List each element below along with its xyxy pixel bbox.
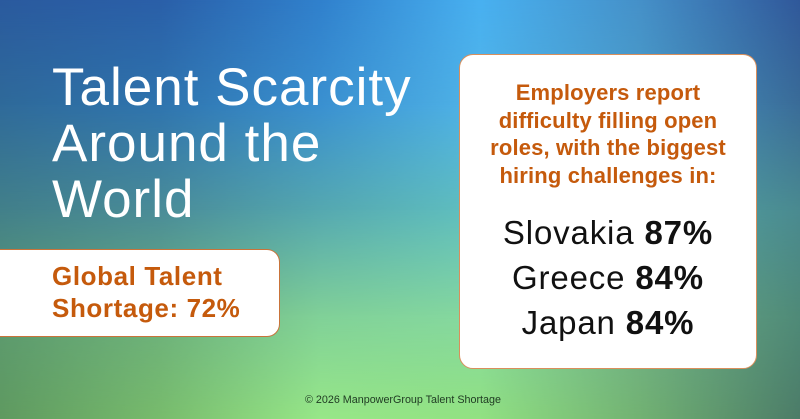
callout text: Shortage: 72% — [52, 293, 240, 323]
country list — [503, 214, 713, 341]
panel heading — [490, 80, 726, 188]
Slovakia: Slovakia 87% — [503, 214, 713, 251]
title — [52, 58, 412, 229]
title: Talent Scarcity — [52, 58, 412, 117]
panel heading: Employers report — [516, 80, 700, 105]
source footer: © 2026 ManpowerGroup Talent Shortage — [305, 394, 501, 406]
panel: global talent shortage — [0, 249, 280, 337]
Greece: Greece 84% — [512, 259, 704, 296]
panel heading: difficulty filling open — [499, 108, 717, 132]
Japan: Japan 84% — [522, 304, 694, 341]
title: Around the — [52, 114, 321, 173]
panel: highest hiring challenges — [459, 54, 757, 369]
panel heading: roles, with the biggest — [490, 135, 726, 160]
callout text — [52, 261, 240, 323]
panel heading: hiring challenges in: — [499, 162, 717, 188]
title: World — [52, 170, 194, 229]
callout text: Global Talent — [52, 261, 223, 291]
